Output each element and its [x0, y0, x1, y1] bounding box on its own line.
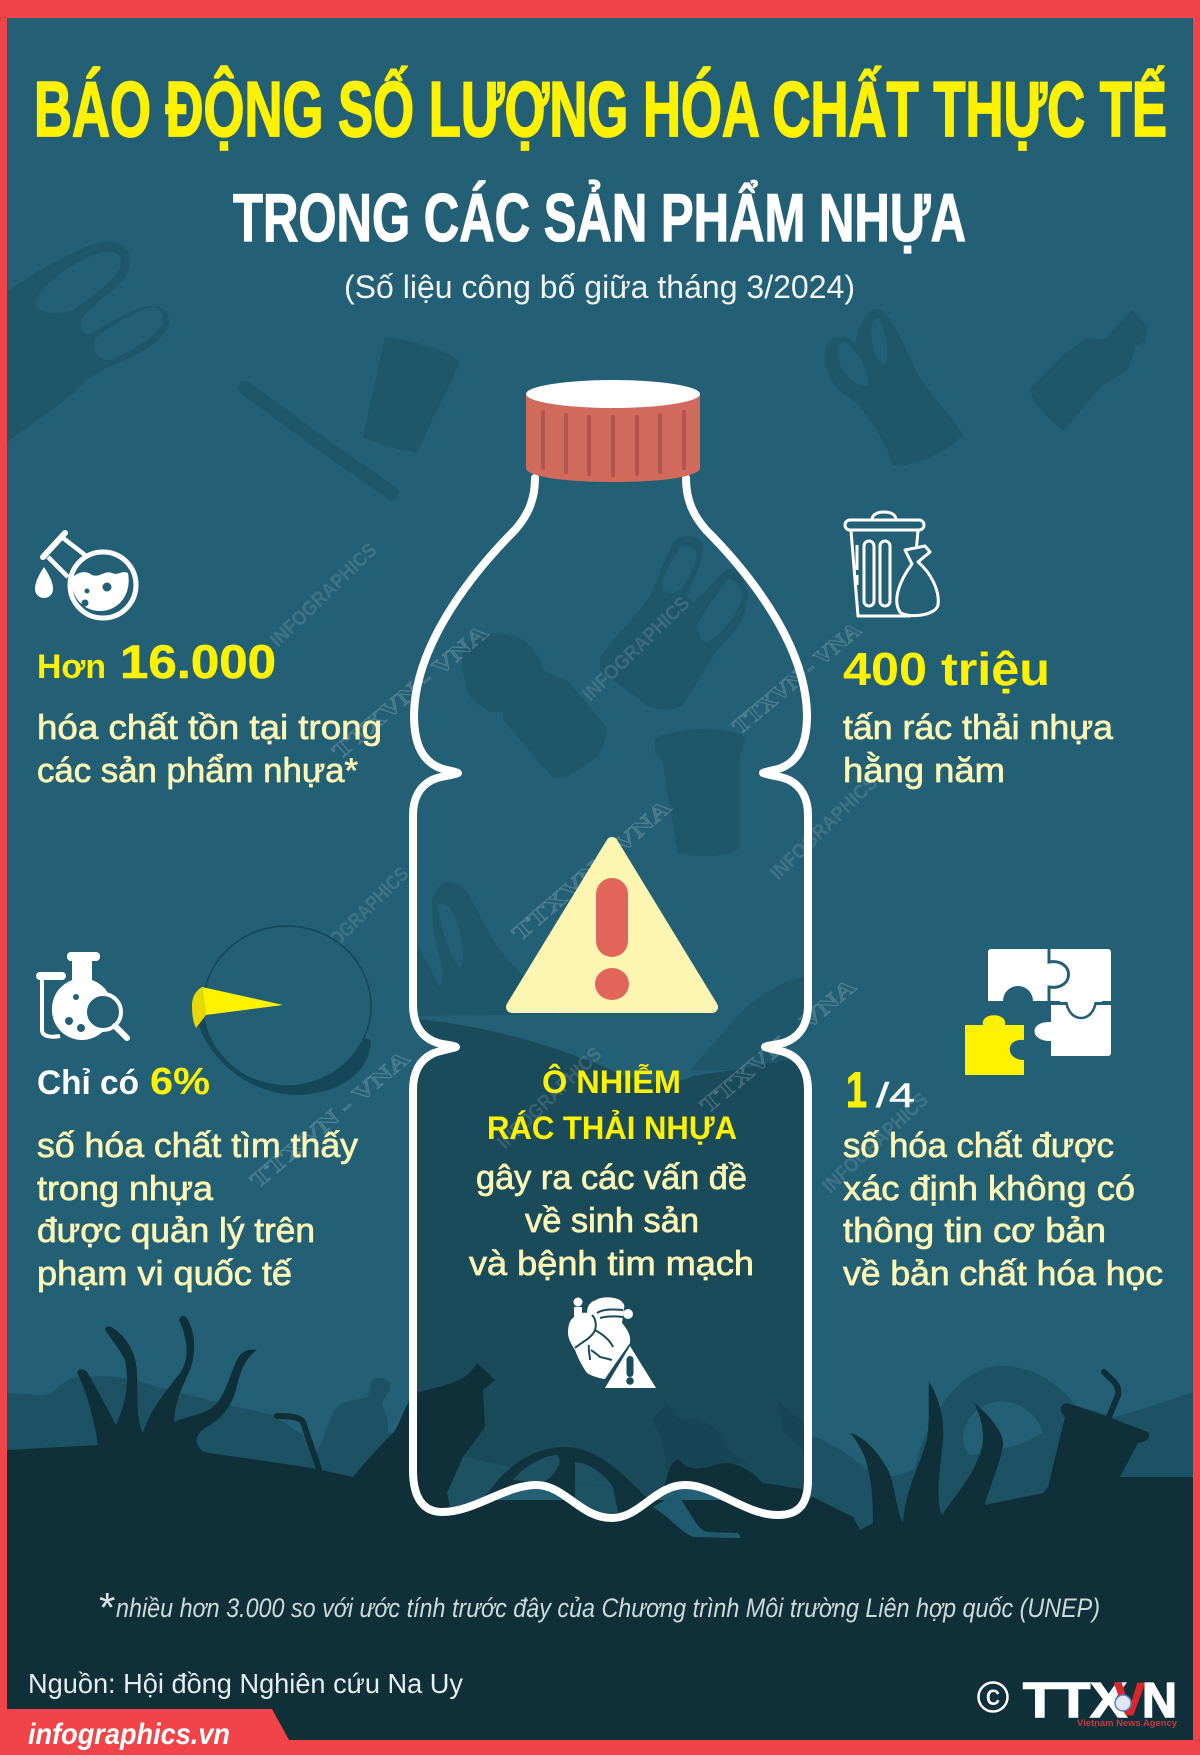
stat: 16.000 chemicals: các sản phẩm nhựa*: [37, 752, 358, 790]
watermarks: INFOGRAPHICS: [818, 1089, 933, 1198]
bottle message: về sinh sản: [525, 1202, 699, 1240]
silhouette: straw: [245, 388, 392, 493]
icon: flask, test tube, magnifier: [36, 952, 127, 1040]
agency logo: C: [986, 1685, 1000, 1710]
bottle message: [469, 1064, 754, 1283]
bottle cap: [526, 380, 700, 482]
bottle message: Ô NHIỄM: [542, 1064, 681, 1100]
silhouette: cup: [363, 337, 460, 452]
site tab: [0, 1709, 289, 1755]
silhouette: plastic bag right: [824, 309, 963, 465]
watermarks: INFOGRAPHICS: [578, 593, 694, 706]
watermarks: [245, 539, 933, 1198]
stat: 6 percent regulated: 6%: [150, 1061, 210, 1103]
stat: 16.000 chemicals: 16.000: [120, 635, 276, 688]
stat: 400 million tonnes: [843, 512, 1113, 790]
bottle message: RÁC THẢI NHỰA: [487, 1110, 737, 1146]
interior silhouette: bag lower: [416, 882, 557, 1016]
interior silhouette: cup: [655, 729, 744, 856]
stat: one quarter unidentified: số hóa chất được: [843, 1127, 1114, 1165]
debris arc in bottle: [483, 1447, 660, 1512]
stat: 16.000 chemicals: hóa chất tồn tại trong: [37, 709, 382, 747]
interior silhouette: bottle: [462, 633, 607, 778]
icon: warning triangle: [512, 843, 712, 1007]
pie chart 6 percent: [192, 926, 371, 1095]
water in bottle: [400, 1018, 815, 1530]
hill ring opening: [963, 1401, 1043, 1455]
lighter wedge in bottle: [447, 1457, 655, 1512]
stat: 6 percent regulated: số hóa chất tìm thấy: [37, 1127, 358, 1165]
agency logo: N: [1142, 1674, 1177, 1728]
stat: 400 million tonnes: hằng năm: [843, 752, 1005, 790]
agency logo: V: [1114, 1673, 1145, 1725]
agency logo: [978, 1673, 1178, 1729]
stat: 6 percent regulated: phạm vi quốc tế: [37, 1255, 292, 1293]
watermarks: TTXVN - VNA: [245, 1045, 415, 1193]
seabed with weeds and debris: [7, 1316, 1193, 1755]
seabed ground and weeds: [7, 1316, 1193, 1755]
stat: one quarter unidentified: 1: [846, 1062, 867, 1118]
watermarks: INFOGRAPHICS: [306, 863, 413, 971]
watermarks: INFOGRAPHICS: [766, 772, 882, 885]
agency logo: TTX: [1023, 1674, 1127, 1728]
stat: one quarter unidentified: xác định không có: [843, 1170, 1135, 1208]
watermarks: INFOGRAPHICS: [266, 539, 381, 652]
left stick: [277, 1416, 320, 1472]
debris dark mound right: [664, 1460, 804, 1511]
watermarks: TTXVN - VNA: [695, 973, 861, 1118]
watermarks: TTXVN - VNA: [727, 617, 866, 739]
stat: one quarter unidentified: thông tin cơ bản: [843, 1212, 1106, 1250]
footnote: [99, 1584, 1100, 1631]
watermarks: TTXVN - VNA: [507, 794, 676, 946]
bottle message: và bệnh tim mạch: [469, 1245, 754, 1283]
stat: 16.000 chemicals: Hơn: [37, 648, 106, 686]
silhouette: bottle right: [1029, 310, 1148, 430]
agency logo: Vietnam News Agency: [1077, 1718, 1178, 1729]
watermarks: INFOGRAPHICS: [493, 1043, 606, 1154]
site tab: infographics.vn: [28, 1718, 230, 1751]
background hills: [7, 1366, 1193, 1540]
stat: one quarter unidentified: /4: [876, 1077, 915, 1115]
icon: flask: [35, 533, 136, 618]
interior silhouette: bag: [600, 536, 748, 710]
stat: 6 percent regulated: Chỉ có: [37, 1064, 139, 1102]
background plastic silhouettes: [7, 241, 1148, 493]
bottle: [413, 380, 808, 1518]
footnote: *: [99, 1584, 115, 1631]
stat: 6 percent regulated: trong nhựa: [37, 1170, 213, 1208]
bottle outline: [413, 478, 808, 1518]
dark bottle debris: [417, 1363, 495, 1508]
stat: 400 million tonnes: tấn rác thải nhựa: [843, 709, 1113, 747]
date note: (Số liệu công bố giữa tháng 3/2024): [344, 269, 855, 305]
stat: 6 percent regulated: [36, 926, 371, 1293]
debris ghost bottle right: [652, 1403, 747, 1470]
source: Nguồn: Hội đồng Nghiên cứu Na Uy: [28, 1668, 463, 1699]
silhouette: plastic bag left: [7, 241, 169, 442]
stat: 6 percent regulated: được quản lý trên: [37, 1212, 315, 1250]
light debris under bottle: [653, 1493, 740, 1538]
icon: puzzle pieces: [965, 949, 1111, 1075]
weed ghost at right edge: [777, 1400, 805, 1453]
icon: trash bin and bag: [845, 512, 938, 616]
stat: 16.000 chemicals: [35, 533, 382, 790]
interior silhouette: right debris: [690, 975, 808, 1070]
bottle interior: [417, 536, 804, 1514]
stat: one quarter unidentified: [843, 949, 1163, 1293]
watermarks: TTXVN - VNA: [327, 619, 493, 764]
bottle message: gây ra các vấn đề: [476, 1159, 747, 1197]
straw debris right: [1104, 1372, 1118, 1417]
icon: heart with warning: [568, 1297, 656, 1388]
stat: 400 million tonnes: 400 triệu: [843, 643, 1050, 695]
stat: one quarter unidentified: về bản chất hóa học: [843, 1255, 1163, 1293]
